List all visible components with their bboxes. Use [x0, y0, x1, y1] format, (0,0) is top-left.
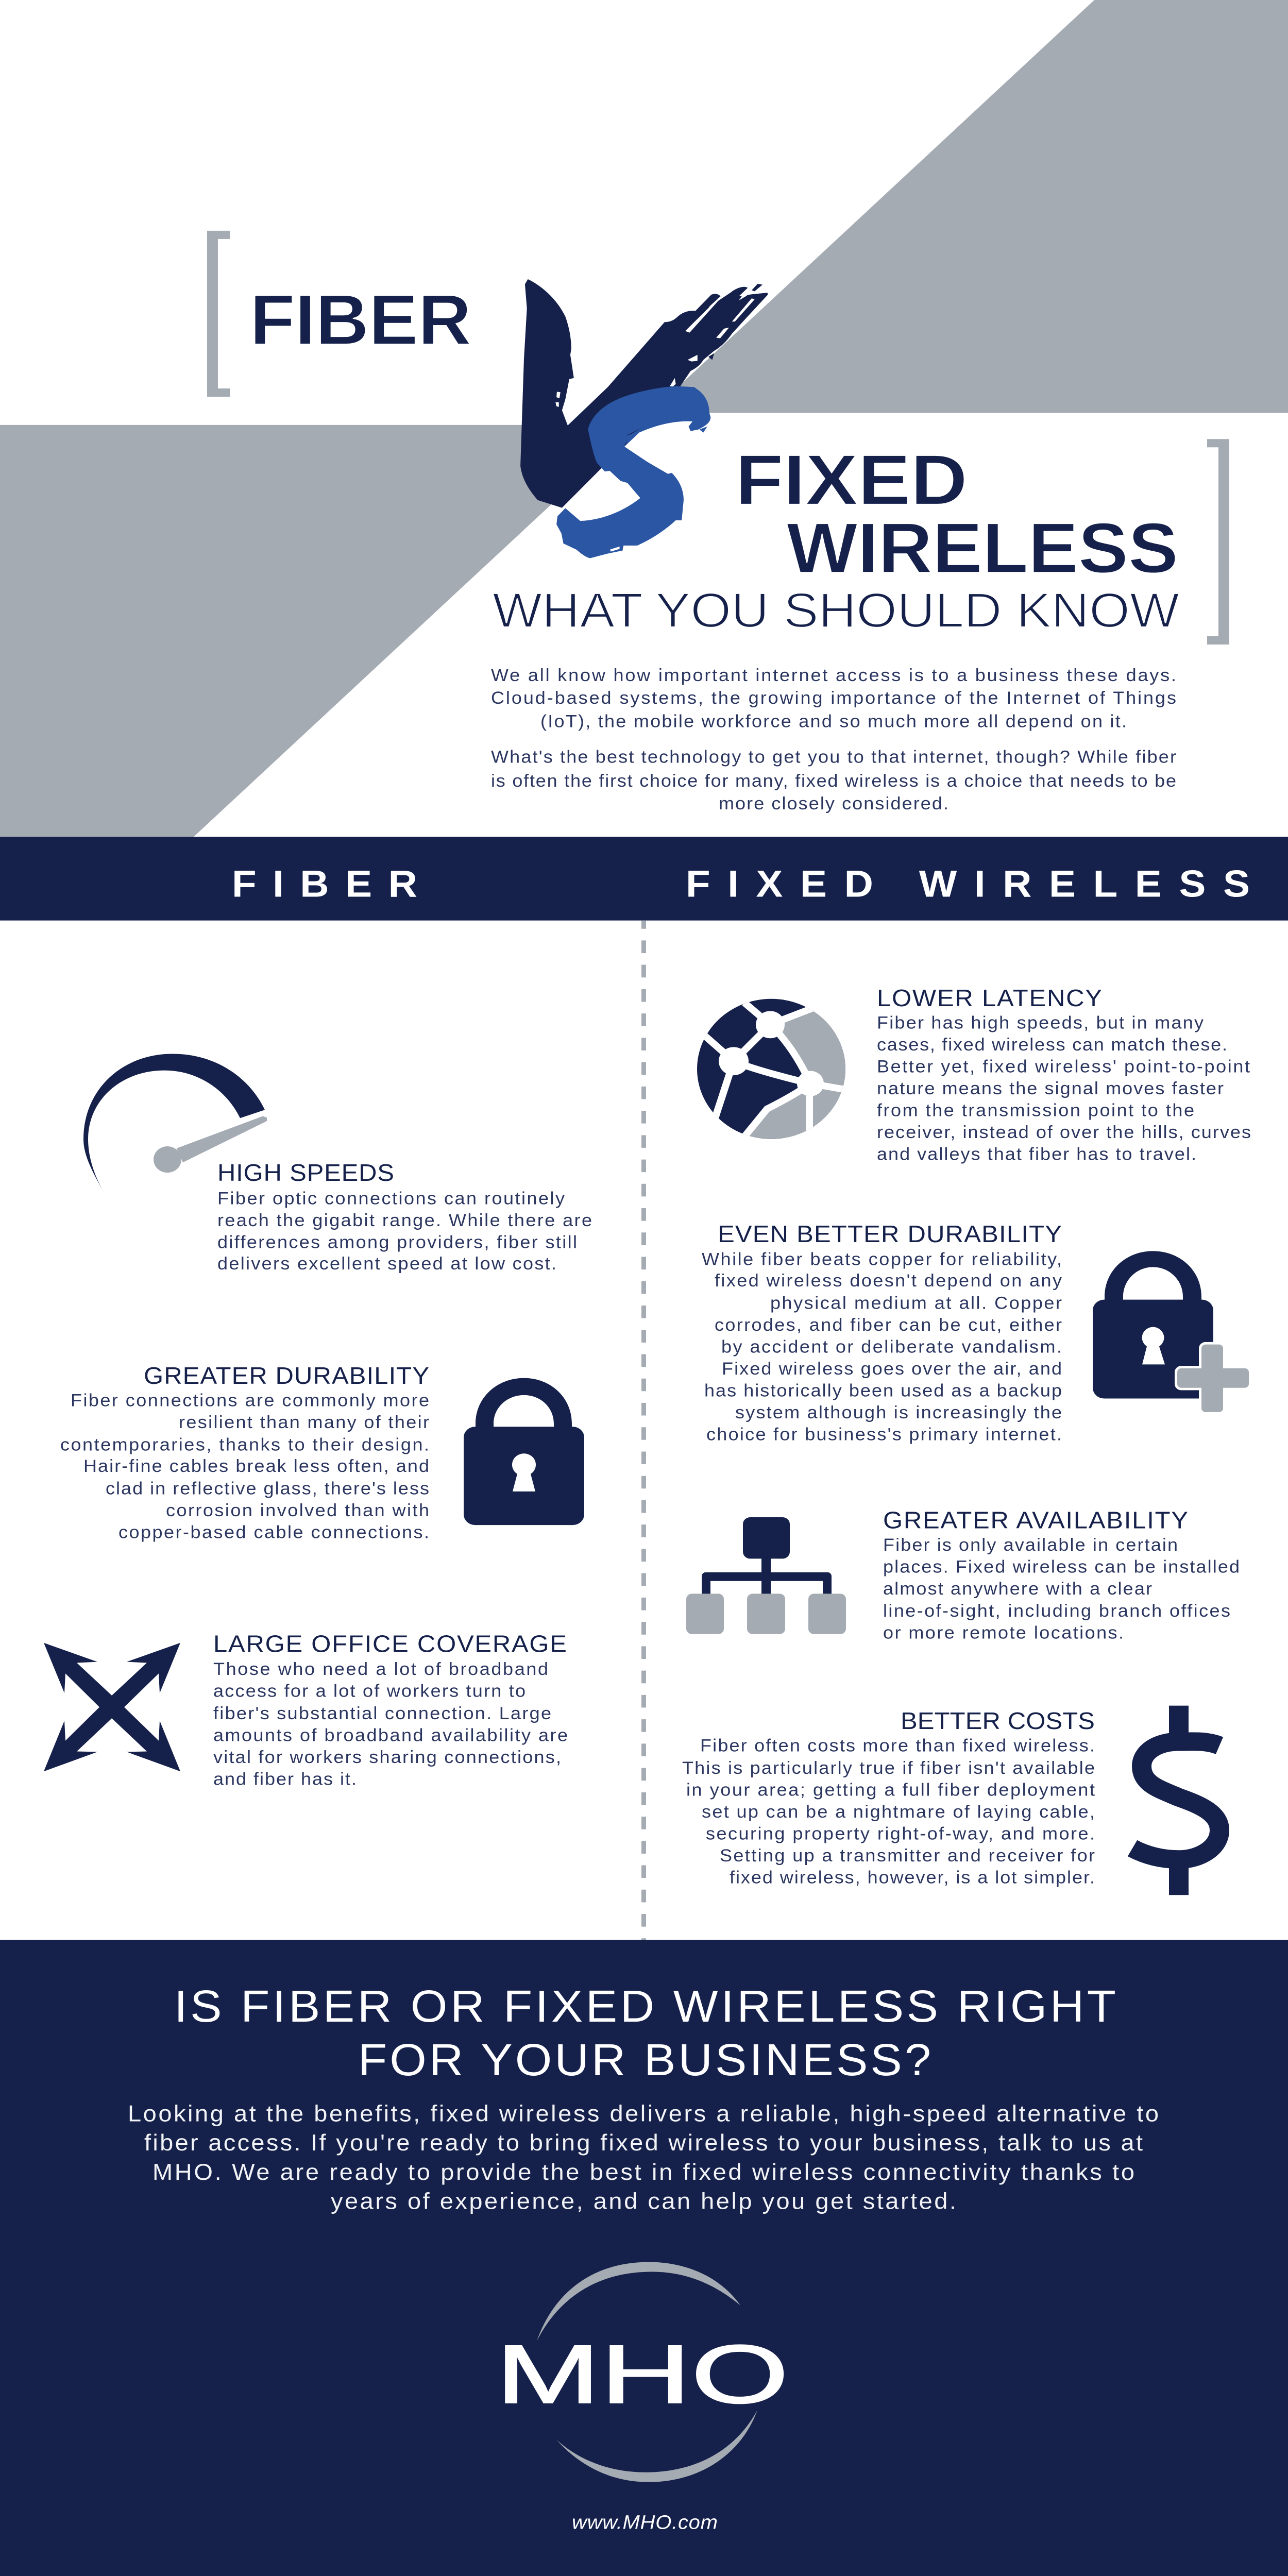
- body text: Hair-fine cables break less often, and: [83, 1456, 429, 1476]
- body text: system although is increasingly the: [735, 1403, 1062, 1422]
- body text: fixed wireless doesn't depend on any: [715, 1271, 1062, 1291]
- column header band: [0, 837, 1288, 921]
- body text: and fiber has it.: [213, 1770, 357, 1789]
- body text: Fiber is only available in certain: [883, 1535, 1178, 1555]
- body text: access for a lot of workers turn to: [213, 1682, 526, 1701]
- body text: vital for workers sharing connections,: [213, 1748, 561, 1767]
- letter V: [520, 279, 768, 508]
- body text: resilient than many of their: [179, 1413, 429, 1432]
- background: left gray wedge: [0, 425, 637, 837]
- body text: [60, 1391, 429, 1542]
- right bracket: [1207, 439, 1229, 645]
- body text: [702, 1249, 1062, 1444]
- title: fiber: FIBER: [250, 280, 471, 360]
- body text: [883, 1535, 1240, 1642]
- heading: GREATER DURABILITY: [144, 1363, 429, 1389]
- title: fixed wireless: FIXED: [735, 440, 968, 520]
- body text: by accident or deliberate vandalism.: [721, 1337, 1062, 1357]
- body text: [128, 2101, 1159, 2214]
- logo: MHO: [496, 2262, 789, 2482]
- intro text: more closely considered.: [719, 794, 948, 814]
- body text: Looking at the benefits, fixed wireless delivers a reliable, high-speed alternative to: [128, 2101, 1159, 2126]
- body text: Fiber connections are commonly more: [71, 1391, 429, 1410]
- intro text: is often the first choice for many, fixed wireless is a choice that needs to be: [491, 771, 1176, 791]
- body text: securing property right-of-way, and more.: [706, 1824, 1095, 1843]
- body text: delivers excellent speed at low cost.: [217, 1254, 556, 1274]
- panel: even better durability: [702, 1221, 1249, 1444]
- body text: has historically been used as a backup: [704, 1381, 1062, 1400]
- heading: GREATER AVAILABILITY: [883, 1507, 1188, 1534]
- heading: BETTER COSTS: [901, 1708, 1095, 1735]
- body text: receiver, instead of over the hills, curves: [877, 1123, 1251, 1142]
- intro text: Cloud-based systems, the growing importance of the Internet of Things: [491, 688, 1176, 708]
- body text: reach the gigabit range. While there are: [217, 1211, 592, 1230]
- left bracket: [207, 231, 230, 397]
- title: fixed wireless: [735, 440, 1178, 588]
- icon: padlock with plus: [1093, 1251, 1249, 1412]
- body text: Fiber optic connections can routinely: [217, 1189, 565, 1208]
- body text: fixed wireless, however, is a lot simpler.: [730, 1868, 1095, 1887]
- body text: clad in reflective glass, there's less: [106, 1479, 429, 1498]
- body text: almost anywhere with a clear: [883, 1579, 1152, 1599]
- body text: [213, 1659, 568, 1789]
- body text: differences among providers, fiber still: [217, 1232, 577, 1252]
- panel: large office coverage: [44, 1631, 568, 1789]
- body text: Those who need a lot of broadband: [213, 1659, 548, 1679]
- letter S: [556, 386, 710, 558]
- body text: MHO. We are ready to provide the best in fixed wireless connectivity thanks to: [152, 2159, 1134, 2185]
- panel: greater availability: [686, 1507, 1240, 1642]
- panel: greater durability: [60, 1363, 584, 1542]
- subtitle: WHAT YOU SHOULD KNOW: [493, 583, 1179, 637]
- body text: Better yet, fixed wireless' point-to-point: [877, 1057, 1250, 1076]
- body text: or more remote locations.: [883, 1623, 1124, 1642]
- body text: places. Fixed wireless can be installed: [883, 1557, 1240, 1577]
- body text: line-of-sight, including branch offices: [883, 1601, 1230, 1621]
- body text: contemporaries, thanks to their design.: [60, 1435, 429, 1454]
- body text: This is particularly true if fiber isn't available: [682, 1758, 1095, 1778]
- body text: [877, 1013, 1251, 1164]
- body text: amounts of broadband availability are: [213, 1726, 568, 1745]
- panel: closing call to action: [0, 1940, 1288, 2576]
- icon: network hierarchy: [686, 1517, 846, 1634]
- body text: [217, 1189, 592, 1274]
- heading: IS FIBER OR FIXED WIRELESS RIGHT: [174, 1981, 1116, 2031]
- website url: www.MHO.com: [572, 2512, 718, 2533]
- heading: [174, 1981, 1116, 2084]
- body text: Fiber has high speeds, but in many: [877, 1013, 1204, 1032]
- intro text: (IoT), the mobile workforce and so much more all depend on it.: [540, 711, 1127, 731]
- intro text: What's the best technology to get you to that internet, though? While fiber: [491, 747, 1176, 767]
- icon: four-way arrows: [44, 1643, 180, 1771]
- body text: in your area; getting a full fiber deployment: [686, 1780, 1095, 1800]
- body text: corrodes, and fiber can be cut, either: [715, 1315, 1062, 1335]
- background: top right gray wedge: [650, 0, 1288, 413]
- body text: While fiber beats copper for reliability,: [702, 1249, 1062, 1269]
- icon: speedometer: [83, 1054, 267, 1195]
- intro text: We all know how important internet access is to a business these days.: [491, 666, 1176, 685]
- heading: EVEN BETTER DURABILITY: [718, 1221, 1062, 1248]
- body text: set up can be a nightmare of laying cable,: [702, 1802, 1095, 1822]
- body text: Fiber often costs more than fixed wireless.: [700, 1736, 1095, 1755]
- body text: nature means the signal moves faster: [877, 1079, 1224, 1098]
- body text: copper-based cable connections.: [118, 1523, 429, 1542]
- body text: Setting up a transmitter and receiver for: [720, 1846, 1095, 1866]
- heading: LARGE OFFICE COVERAGE: [213, 1631, 567, 1657]
- body text: [682, 1736, 1095, 1887]
- panel: better costs: [682, 1706, 1219, 1895]
- band label: fiber: FIBER: [232, 862, 417, 905]
- intro text: [491, 666, 1176, 814]
- icon: padlock: [464, 1378, 584, 1525]
- heading: LOWER LATENCY: [877, 985, 1102, 1012]
- dashed center divider: [641, 921, 646, 1940]
- icon: network globe: [696, 998, 855, 1142]
- body text: cases, fixed wireless can match these.: [877, 1035, 1227, 1055]
- body text: and valleys that fiber has to travel.: [877, 1144, 1196, 1164]
- body text: physical medium at all. Copper: [770, 1294, 1062, 1313]
- title: fixed wireless: WIRELESS: [787, 509, 1178, 588]
- panel: lower latency: [696, 985, 1251, 1164]
- heading: FOR YOUR BUSINESS?: [358, 2035, 931, 2084]
- panel: high speeds: [83, 1054, 592, 1274]
- icon: dollar sign: [1132, 1706, 1219, 1895]
- logo: MHO: MHO: [496, 2328, 789, 2421]
- body text: from the transmission point to the: [877, 1100, 1194, 1120]
- body text: years of experience, and can help you get started.: [331, 2189, 956, 2214]
- body text: choice for business's primary internet.: [706, 1425, 1062, 1444]
- body text: fiber's substantial connection. Large: [213, 1704, 551, 1723]
- body text: corrosion involved than with: [166, 1501, 429, 1520]
- icon: brushed VS lettering: [520, 279, 768, 558]
- heading: HIGH SPEEDS: [217, 1160, 394, 1187]
- body text: Fixed wireless goes over the air, and: [722, 1359, 1062, 1379]
- band label: fixed wireless: FIXED WIRELESS: [686, 862, 1250, 905]
- body text: fiber access. If you're ready to bring fixed wireless to your business, talk to us at: [144, 2130, 1143, 2156]
